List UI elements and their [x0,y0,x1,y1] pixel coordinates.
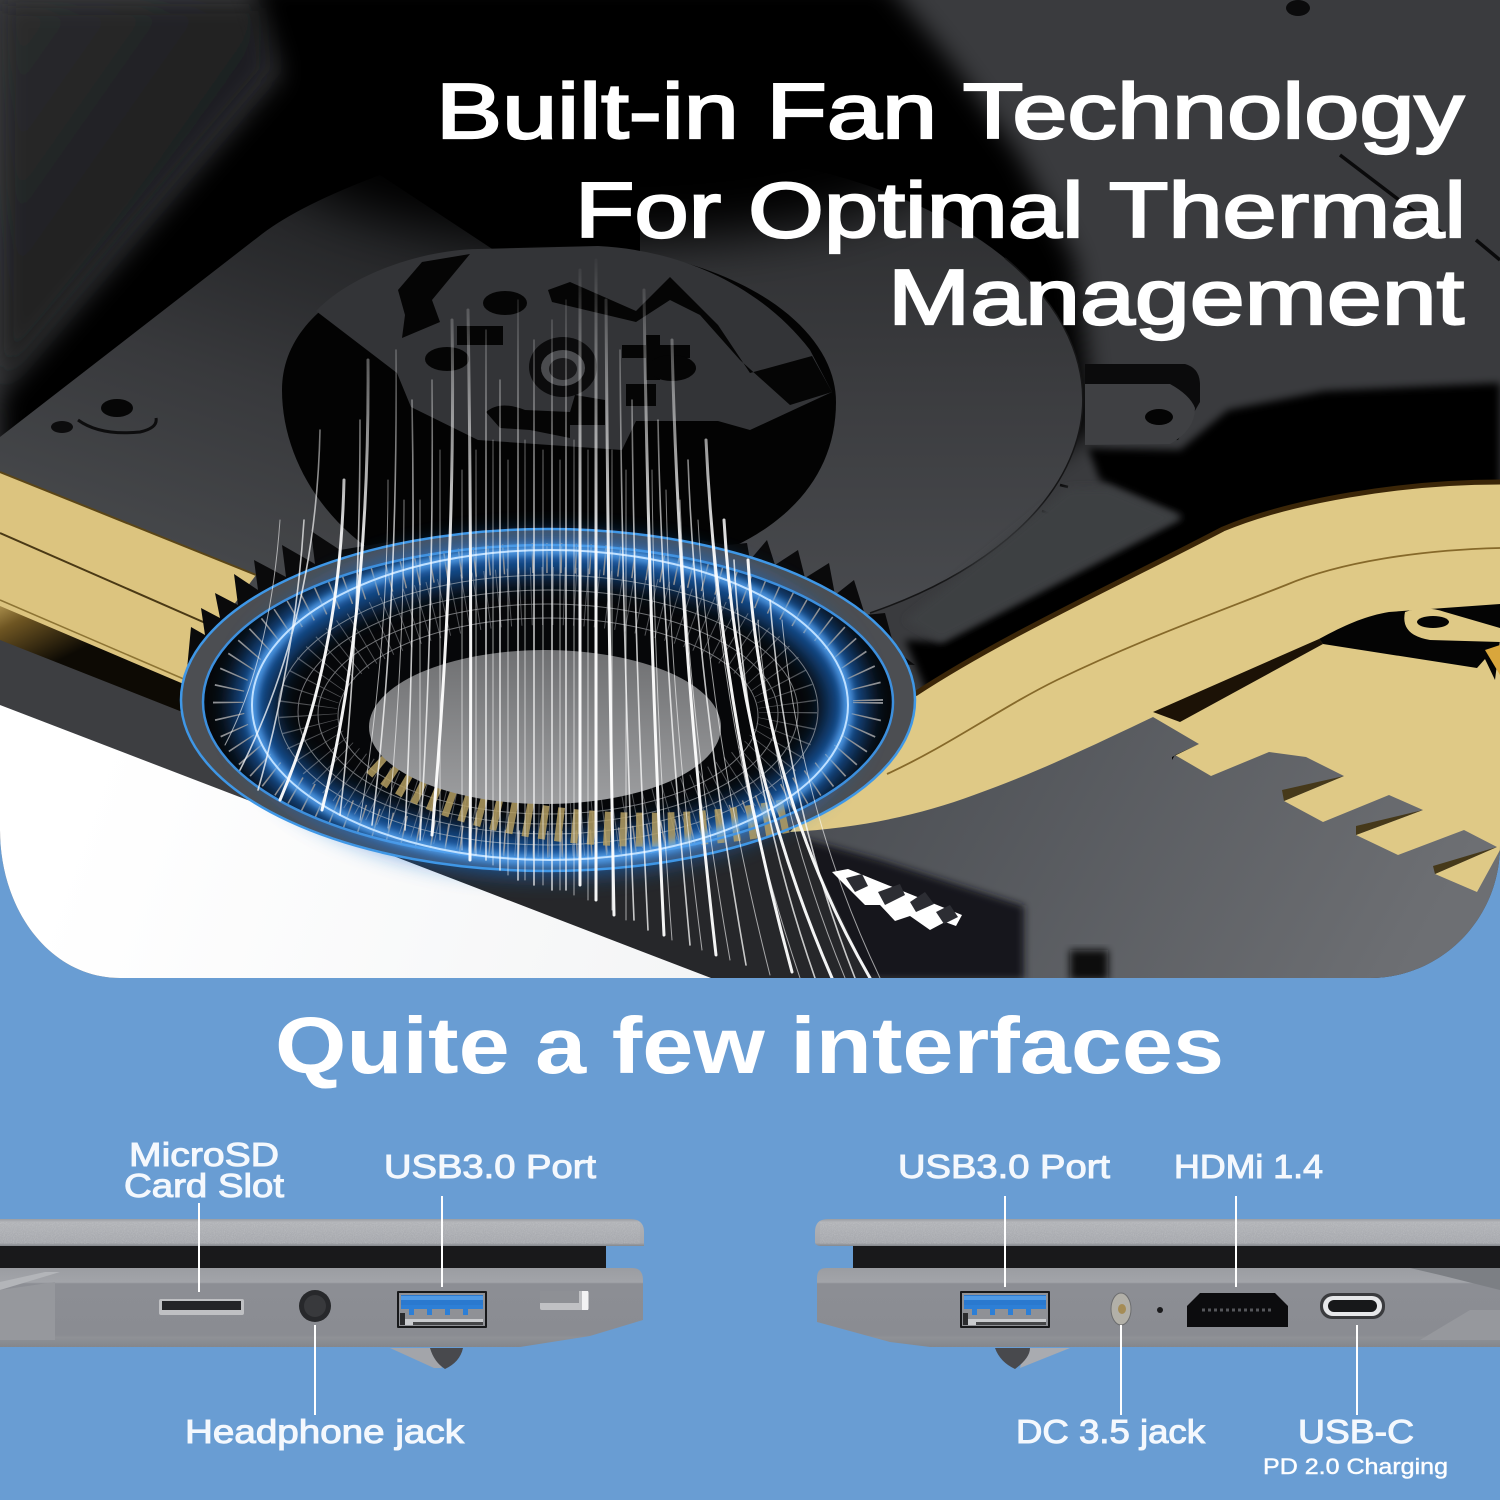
casing right edge line [870,258,1083,613]
leader microSD [198,1203,200,1292]
HDMI port [1187,1293,1288,1327]
lower left dark strip [0,640,180,725]
airflow streaks [225,260,880,978]
label: DC jack: DC 3.5 jack [1016,1413,1206,1450]
foot left [390,1348,463,1369]
title: For Optimal Thermal [575,166,1466,254]
label: USB left: USB3.0 Port [384,1148,596,1185]
screen lid left [0,1219,644,1246]
lower dark band with vents [805,834,1029,978]
black shadow across top centre [0,0,1100,462]
LED dot [1157,1307,1163,1313]
title: Management [888,253,1464,341]
USB port left [397,1291,487,1328]
fan inlet black opening [282,264,836,546]
white desk wedge [0,705,711,978]
leader USB-C [1356,1325,1358,1415]
panel: fan hero illustration [0,0,1500,980]
leader DC [1120,1325,1122,1415]
label: microSD: Card Slot [124,1167,284,1204]
left screw boss [51,399,156,433]
dark chassis under wheel [398,830,866,978]
casing mounting lug [1085,364,1200,445]
USB-C port [1320,1293,1385,1319]
label: HDMI: HDMi 1.4 [1174,1148,1323,1185]
lower right plate [792,717,1500,978]
microSD slot [159,1299,244,1315]
outer thin blue rim [181,529,915,871]
screen lid right [815,1219,1500,1246]
bright glow ring [252,550,848,860]
white vent slot [832,869,962,930]
fan casing half disc [640,184,1082,614]
shadow over casing top [308,150,910,262]
heading: interfaces: Quite a few interfaces [275,1001,1224,1090]
USB port right [960,1291,1050,1328]
label: USB right: USB3.0 Port [898,1148,1110,1185]
DC jack [1111,1293,1131,1325]
inner blue ring [203,545,893,859]
laptop side view: left [0,1136,644,1450]
leader USB left [441,1196,443,1287]
leader HDMI [1235,1196,1237,1287]
label: USB-C: USB-C [1298,1413,1414,1450]
label: PD charging: PD 2.0 Charging [1263,1454,1448,1479]
dark upper-left plate [0,0,272,385]
lock slot [540,1291,589,1310]
gray wedge between casing and pipe [905,487,1182,642]
keyboard gap right [853,1246,1500,1270]
fan wheel [181,529,915,871]
metal grain left [0,1222,640,1244]
laptop side view: right [815,1148,1500,1479]
lower-left chassis plate [0,186,492,605]
label: headphone: Headphone jack [185,1413,465,1450]
inlet motor plate with cut-outs [316,246,832,450]
right heat pipe and heat spreader [790,482,1500,892]
title: Built-in Fan Technology [436,67,1464,155]
leader USB right [1004,1196,1006,1287]
top right screw [1286,0,1310,16]
metal grain right [820,1222,1500,1244]
label: microSD [124,1136,284,1204]
left heat pipe [0,472,256,725]
shadow above right heat pipe [905,383,1500,700]
casing edge notches [1042,485,1068,514]
foot right [995,1348,1070,1369]
label: microSD: MicroSD [129,1136,279,1173]
vent slots top right [1340,155,1500,260]
crosshatched impeller [278,575,818,845]
radial fin ticks [228,558,868,846]
heat-sink fin teeth [186,531,915,680]
blue glow halo [252,555,848,855]
headphone jack [299,1290,331,1322]
base left [0,1268,643,1347]
leader headphone [314,1325,316,1415]
title [436,67,1466,341]
gold blades at lower rim [378,760,790,830]
base right [817,1268,1500,1347]
central hub [369,650,721,804]
keyboard gap left [0,1246,606,1268]
